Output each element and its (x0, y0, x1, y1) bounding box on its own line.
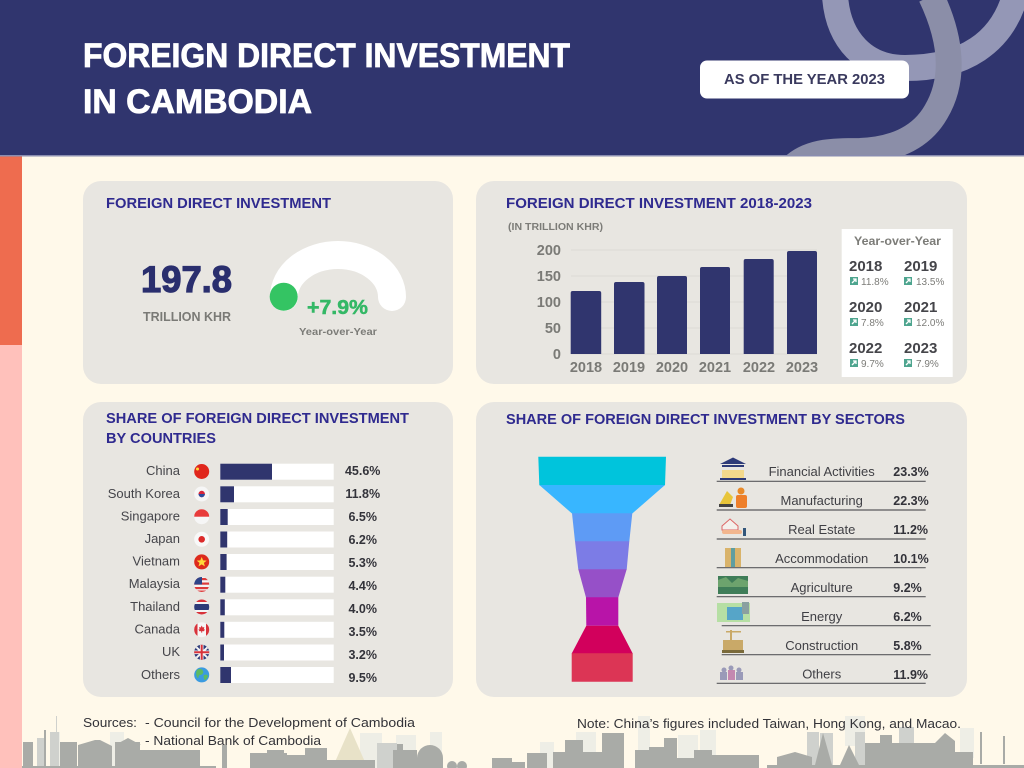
bar chart: 50 (545, 321, 561, 337)
bar chart: 2021 (699, 360, 731, 376)
year-over-year table: 2023 (904, 340, 937, 357)
country labels: China (146, 463, 181, 478)
sector labels: Real Estate (788, 522, 855, 537)
date badge (700, 60, 909, 98)
year-over-year table: 7.8% (861, 318, 884, 329)
bar chart: 2020 (656, 360, 688, 376)
year-over-year table: 11.8% (861, 277, 889, 288)
bar chart: 2022 (743, 360, 775, 376)
sources: - National Bank of Cambodia (145, 734, 321, 748)
title (83, 37, 570, 121)
country labels: Canada (134, 622, 181, 636)
sector labels: Others (802, 666, 842, 682)
panel: share by sectors (476, 402, 967, 697)
country labels: UK (162, 644, 180, 659)
funnel chart (538, 457, 666, 682)
sources: - Council for the Development of Cambodia (145, 716, 415, 730)
country labels: Others (141, 667, 180, 682)
year-over-year table: 7.9% (916, 359, 939, 370)
sector labels: Energy (801, 609, 843, 624)
bar track and values: 9.5% (348, 671, 377, 685)
year-over-year table (842, 229, 953, 377)
year-over-year table: 13.5% (916, 277, 944, 288)
sector labels (769, 464, 875, 682)
sources: Sources: (83, 716, 137, 730)
heading: SHARE OF FOREIGN DIRECT INVESTMENT (106, 411, 409, 427)
sector labels: Manufacturing (781, 493, 863, 508)
title: FOREIGN DIRECT INVESTMENT (83, 37, 570, 75)
big number: TRILLION KHR (143, 310, 231, 324)
country labels: Vietnam (133, 554, 180, 568)
bar track and values: 45.6% (345, 464, 380, 478)
sector labels: Financial Activities (769, 464, 875, 479)
bar chart: 2019 (613, 360, 645, 376)
country labels: Japan (145, 531, 180, 546)
bar chart: 0 (553, 347, 561, 363)
sector values: 11.2% (893, 523, 928, 537)
bar track and values: 3.5% (348, 625, 377, 639)
sector values: 10.1% (893, 552, 929, 566)
heading: BY COUNTRIES (106, 431, 216, 447)
bar track and values: 3.2% (348, 648, 377, 662)
year-over-year table: 2022 (849, 340, 882, 357)
decorative swirl (795, 0, 1015, 165)
bar track and values: 6.2% (348, 533, 377, 547)
bar chart: 200 (537, 243, 561, 259)
note: Note: China’s figures included Taiwan, Hong Kong, and Macao. (577, 717, 961, 731)
big number: 197.8 (141, 259, 232, 300)
bar chart: 150 (537, 269, 561, 285)
year-over-year table: 12.0% (916, 318, 944, 329)
bar chart: 2023 (786, 360, 818, 376)
sector values: 11.9% (893, 668, 928, 682)
unit label: (IN TRILLION KHR) (508, 221, 603, 233)
country labels: Singapore (121, 508, 180, 524)
date badge: AS OF THE YEAR 2023 (724, 71, 885, 88)
bar track and values: 4.0% (348, 602, 377, 616)
bar chart: 100 (537, 295, 561, 311)
title: IN CAMBODIA (83, 83, 312, 121)
heading: FOREIGN DIRECT INVESTMENT (106, 196, 331, 212)
gauge: Year-over-Year (299, 326, 377, 338)
bar chart (537, 243, 818, 376)
year-over-year table: Year-over-Year (854, 236, 942, 248)
heading: FOREIGN DIRECT INVESTMENT 2018-2023 (506, 196, 812, 212)
sector values: 9.2% (893, 581, 922, 595)
bar track and values: 11.8% (345, 487, 380, 501)
year-over-year table: 2021 (904, 299, 937, 316)
bar track and values: 5.3% (348, 556, 377, 570)
sources (83, 716, 415, 748)
panel: share by countries (83, 402, 453, 697)
year-over-year table: 2020 (849, 299, 882, 316)
sector values: 22.3% (893, 494, 929, 508)
flag icons (193, 464, 210, 682)
bar track and values: 6.5% (348, 510, 377, 524)
sector icons (717, 458, 750, 680)
big number (141, 259, 232, 324)
header band (0, 0, 1024, 165)
country labels (108, 463, 181, 682)
country labels: Malaysia (129, 576, 181, 591)
panel: FDI 2018-2023 (476, 181, 967, 384)
heading (106, 411, 409, 447)
year-over-year table: 2019 (904, 258, 937, 275)
skyline illustration (22, 716, 1024, 768)
bar track and values: 4.4% (348, 579, 377, 593)
country labels: Thailand (130, 599, 180, 614)
heading: SHARE OF FOREIGN DIRECT INVESTMENT BY SECTORS (506, 412, 905, 428)
sector values: 23.3% (893, 465, 929, 479)
gauge: +7.9% (307, 297, 368, 319)
sector values: 5.8% (893, 639, 922, 653)
sector labels: Construction (785, 638, 858, 653)
sector values (893, 465, 929, 682)
left accent strip (0, 156, 22, 768)
sector labels: Accommodation (775, 551, 868, 566)
panel: foreign direct investment total (83, 181, 453, 384)
sector labels: Agriculture (791, 580, 853, 595)
year-over-year table: 2018 (849, 258, 882, 275)
bar track and values (220, 464, 380, 685)
year-over-year table: 9.7% (861, 359, 884, 370)
country labels: South Korea (108, 486, 181, 501)
sector values: 6.2% (893, 610, 922, 624)
gauge (270, 255, 392, 338)
bar chart: 2018 (570, 360, 602, 376)
